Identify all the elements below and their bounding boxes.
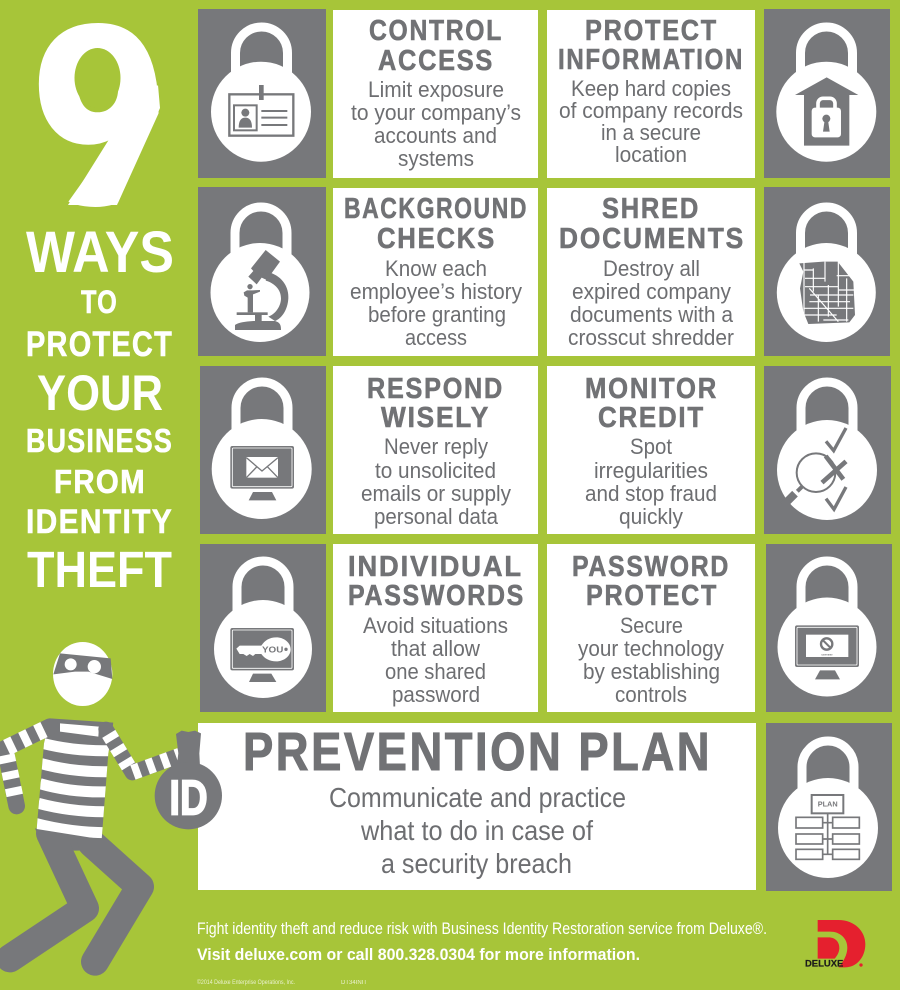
- panel: background checks text: CHECKS: [377, 223, 496, 255]
- panel: background checks text: BACKGROUND: [344, 193, 528, 225]
- logo: Deluxe: [805, 920, 865, 969]
- panel: background checks text: employee’s history: [350, 279, 523, 304]
- footer text: DT34INIT: [341, 980, 367, 986]
- legs: [10, 828, 140, 962]
- title: [20, 0, 180, 598]
- panel: control access text: to your company’s: [351, 100, 521, 125]
- panel: shred documents text: DOCUMENTS: [559, 223, 745, 255]
- panel: password protect text: [547, 544, 755, 712]
- panel: protect information text: location: [615, 142, 687, 167]
- footer text: Fight identity theft and reduce risk with Business Identity Restoration service from Deluxe®.: [197, 919, 767, 938]
- panel: shred documents text: crosscut shredder: [568, 325, 734, 350]
- panel: control access text: ACCESS: [378, 45, 494, 77]
- panel: protect information text: INFORMATION: [558, 44, 744, 76]
- panel: individual passwords text: password: [392, 682, 480, 707]
- panel: monitor credit text: and stop fraud: [585, 481, 717, 506]
- panel: shred documents text: expired company: [572, 279, 732, 304]
- panel: password protect icon: username: [821, 655, 833, 657]
- panel: protect information icon: [764, 9, 890, 178]
- panel: password protect text: Secure: [620, 613, 683, 638]
- panel: protect information text: PROTECT: [585, 15, 718, 47]
- panel: monitor credit text: quickly: [619, 504, 684, 529]
- panel: background checks text: before granting: [368, 302, 506, 327]
- panel: background checks icon: [198, 187, 326, 356]
- masked head: [53, 642, 112, 706]
- title: IDENTITY: [26, 503, 173, 541]
- panel: protect information text: in a secure: [601, 120, 701, 145]
- panel: respond wisely text: personal data: [374, 504, 498, 529]
- panel: respond wisely text: [333, 366, 538, 534]
- panel: individual passwords text: that allow: [391, 636, 481, 661]
- panel: control access icon: [198, 9, 326, 178]
- title: PROTECT: [26, 325, 173, 364]
- ID bag: ID: [169, 770, 208, 825]
- panel: monitor credit text: Spot: [630, 434, 673, 459]
- illustration: thief with ID bag: [5, 642, 222, 962]
- panel: protect information text: Keep hard copies: [571, 76, 731, 101]
- arm holding nothing: [5, 727, 50, 806]
- panel: monitor credit text: MONITOR: [585, 373, 718, 405]
- panel: monitor credit text: CREDIT: [598, 402, 705, 434]
- panel: background checks text: access: [405, 325, 467, 350]
- panel: monitor credit text: irregularities: [594, 458, 708, 483]
- title: TO: [81, 284, 118, 320]
- title: BUSINESS: [26, 422, 173, 459]
- title: WAYS: [26, 220, 174, 285]
- panel: password protect text: PROTECT: [586, 580, 718, 612]
- panel: shred documents text: documents with a: [570, 302, 733, 327]
- panel: shred documents text: [547, 188, 755, 356]
- title: YOUR: [37, 365, 163, 421]
- arm holding bag: [106, 729, 180, 773]
- panel: background checks text: [333, 188, 538, 356]
- panel: password protect text: PASSWORD: [572, 551, 730, 583]
- panel: respond wisely text: to unsolicited: [375, 458, 496, 483]
- panel: prevention plan text: what to do in case of: [360, 815, 593, 846]
- panel: control access text: Limit exposure: [368, 77, 504, 102]
- panel: control access text: accounts and: [374, 123, 497, 148]
- panel: password protect text: by establishing: [583, 659, 720, 684]
- panel: password protect text: your technology: [578, 636, 725, 661]
- panel: respond wisely icon: [200, 366, 326, 534]
- panel: individual passwords icon: [200, 544, 326, 712]
- panel: respond wisely text: Never reply: [384, 434, 489, 459]
- panel: prevention plan text: a security breach: [381, 848, 572, 879]
- panel: shred documents text: SHRED: [602, 193, 700, 225]
- panel: prevention plan text: [198, 722, 756, 890]
- ID bag: [155, 731, 222, 829]
- title: FROM: [54, 463, 146, 500]
- panel: prevention plan text: Communicate and practice: [329, 782, 626, 813]
- panel: individual passwords text: INDIVIDUAL: [348, 551, 523, 583]
- title: THEFT: [27, 541, 172, 598]
- striped torso: [36, 718, 114, 838]
- panel: control access text: CONTROL: [369, 15, 503, 47]
- panel: monitor credit icon: [764, 366, 891, 534]
- panel: control access text: [333, 10, 538, 178]
- panel: individual passwords text: one shared: [385, 659, 486, 684]
- footer text: Visit deluxe.com or call 800.328.0304 for more information.: [197, 945, 640, 964]
- panel: respond wisely text: WISELY: [381, 402, 490, 434]
- panel: individual passwords text: PASSWORDS: [348, 580, 525, 612]
- panel: shred documents icon: [764, 187, 890, 356]
- panel: shred documents text: Destroy all: [603, 256, 700, 281]
- panel: password protect icon: [766, 544, 892, 712]
- logo: Deluxe: DELUXE: [805, 959, 843, 969]
- panel: protect information text: [547, 10, 755, 178]
- footer text: ©2014 Deluxe Enterprise Operations, Inc.: [197, 979, 295, 986]
- panel: monitor credit text: [547, 366, 755, 534]
- panel: password protect text: controls: [615, 682, 687, 707]
- panel: respond wisely text: RESPOND: [367, 373, 504, 405]
- panel: prevention plan text: PREVENTION PLAN: [243, 722, 712, 782]
- panel: prevention plan icon: PLAN: [818, 800, 838, 809]
- panel: background checks text: Know each: [385, 256, 487, 281]
- panel: control access text: systems: [398, 146, 474, 171]
- panel: individual passwords text: Avoid situations: [363, 613, 508, 638]
- panel: protect information text: of company records: [559, 98, 743, 123]
- footer text: [197, 919, 767, 986]
- panel: individual passwords icon: YOU: [262, 645, 284, 654]
- panel: respond wisely text: emails or supply: [361, 481, 512, 506]
- panel: prevention plan icon: [766, 723, 892, 891]
- panel: individual passwords text: [333, 544, 538, 712]
